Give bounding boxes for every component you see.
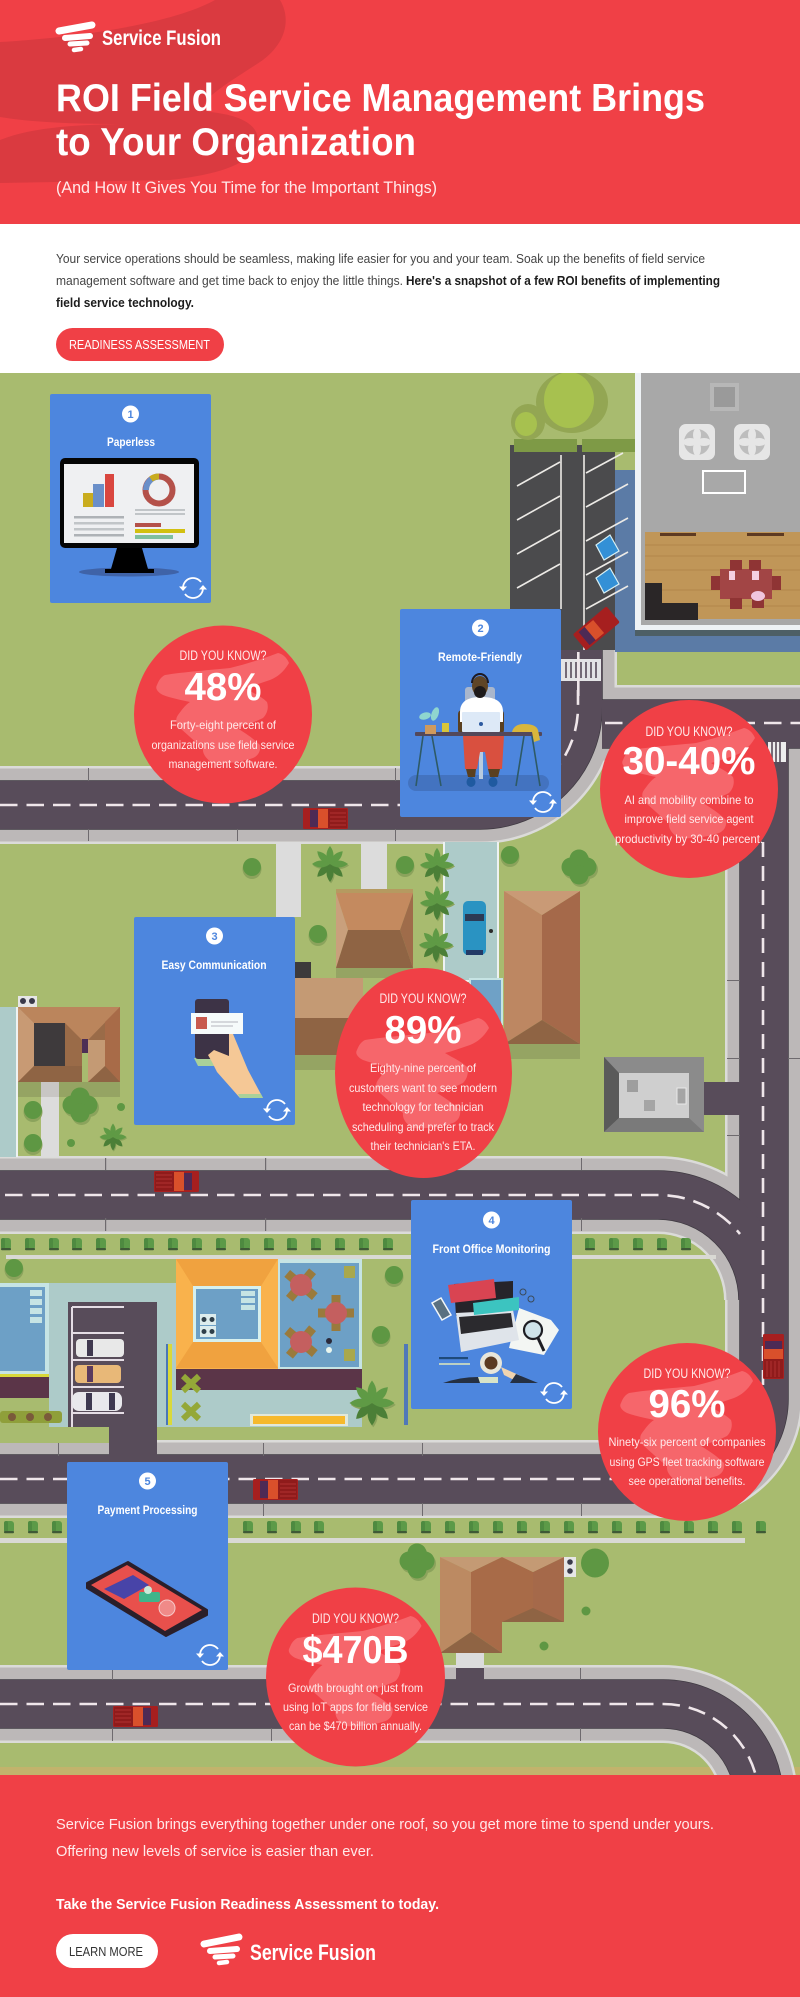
panel: card 2 remote-friendly: Remote-Friendly [438, 650, 522, 664]
header banner [0, 0, 800, 224]
icon: sync [263, 1100, 291, 1120]
panel: card 1 paperless: Paperless [107, 435, 155, 449]
callout: did you know $470B: Growth brought on just from [288, 1681, 423, 1695]
callout: did you know 96%: 96% [648, 1383, 726, 1426]
cafe roof [176, 1259, 278, 1369]
panel: card 5 payment processing: Payment Processing [98, 1503, 198, 1517]
icon: sync [529, 792, 557, 812]
callout: did you know $470B [266, 1588, 445, 1766]
panel: card 3 easy communication: Easy Communication [162, 958, 266, 972]
subtitle: (And How It Gives You Time for the Important Things) [56, 178, 437, 197]
callout: did you know $470B: can be $470 billion annually. [289, 1719, 422, 1733]
callout: did you know 48%: 48% [184, 666, 262, 709]
accessible parking signs [596, 535, 619, 593]
trees [511, 371, 608, 440]
title [56, 77, 705, 164]
callout: did you know 96%: DID YOU KNOW? [644, 1366, 730, 1381]
road network [0, 650, 800, 1800]
intro paragraph: field service technology. [56, 295, 194, 310]
callout: did you know 89%: DID YOU KNOW? [380, 991, 466, 1006]
grey utility building [604, 1057, 740, 1132]
callout: did you know 96%: Ninety-six percent of companies [608, 1435, 766, 1449]
house roof [504, 891, 580, 1059]
intro paragraph: Your service operations should be seamless, making life easier for you and your team. Soak up the benefits of field service [56, 251, 705, 266]
callout: did you know 89%: customers want to see modern [349, 1081, 497, 1095]
callout: did you know $470B: $470B [302, 1629, 408, 1672]
shrub row [0, 1411, 62, 1423]
footer text: Service Fusion brings everything together under one roof, so you get more time to spend under yours. [56, 1816, 714, 1833]
callout: did you know 48%: DID YOU KNOW? [180, 648, 266, 663]
callout: did you know 96%: using GPS fleet tracking software [610, 1455, 765, 1469]
callout: did you know 89%: technology for technician [362, 1100, 484, 1114]
callout: did you know 89%: their technician's ETA. [370, 1139, 476, 1153]
callout: did you know 48%: Forty-eight percent of [170, 718, 277, 732]
parked red car [573, 606, 620, 651]
crosswalks [561, 652, 786, 762]
callout: did you know 48% [134, 626, 312, 804]
callout: did you know 89%: scheduling and prefer to track [352, 1120, 495, 1134]
house left [0, 996, 120, 1157]
house roof [295, 978, 363, 1070]
conference room [645, 532, 800, 620]
map illustration [0, 371, 800, 1800]
callout: did you know $470B: using IoT apps for field service [283, 1700, 428, 1714]
callout: did you know $470B: DID YOU KNOW? [312, 1611, 399, 1626]
callout: did you know 96%: see operational benefits. [628, 1474, 746, 1488]
panel: card 5 payment processing [67, 1462, 228, 1670]
callout: did you know 30-40% [600, 700, 778, 878]
intro paragraph [56, 251, 720, 310]
callout: did you know 89%: Eighty-nine percent of [370, 1061, 477, 1075]
icon: desk with laptop [432, 1279, 559, 1383]
panel: card 5 payment processing: 5 [144, 1476, 151, 1488]
panel: card 4 front office monitoring: Front Office Monitoring [432, 1242, 550, 1256]
intro paragraph: Here's a snapshot of a few ROI benefits of implementing [406, 273, 720, 288]
lot details [4, 1259, 408, 1427]
callout: did you know 48%: management software. [168, 757, 278, 771]
red cars [113, 808, 784, 1727]
title: ROI Field Service Management Brings [56, 77, 705, 120]
icon: person at desk [408, 674, 549, 791]
button: readiness assessment: READINESS ASSESSMENT [69, 337, 210, 352]
icon: sync [179, 578, 207, 598]
parking area [68, 1302, 157, 1457]
panel: card 1 paperless [50, 394, 211, 603]
title: to Your Organization [56, 121, 416, 164]
callout: did you know 30-40%: productivity by 30-40 percent. [615, 832, 763, 846]
button: learn more [56, 1934, 158, 1968]
commercial lot [0, 1259, 408, 1457]
building roof [635, 373, 800, 636]
callout: did you know 96% [598, 1343, 776, 1521]
panel: card 2 remote-friendly [400, 609, 561, 817]
icon: hand with phone [191, 999, 263, 1098]
footer logo [204, 1937, 376, 1965]
callout: did you know 30-40%: DID YOU KNOW? [646, 724, 732, 739]
callout: did you know 48%: organizations use field service [152, 738, 295, 752]
logo: Service Fusion: Service Fusion [102, 27, 221, 50]
icon: monitor dashboard [60, 458, 199, 576]
button: learn more: LEARN MORE [69, 1944, 143, 1959]
panel: card 3 easy communication: 3 [211, 931, 218, 943]
left building [0, 1283, 49, 1398]
footer text [56, 1816, 714, 1860]
button: readiness assessment [56, 328, 224, 361]
footer logo: Service Fusion [250, 1940, 376, 1965]
panel: card 1 paperless: 1 [127, 409, 134, 421]
hedgerows [0, 1238, 766, 1543]
callout: did you know 30-40%: 30-40% [622, 740, 756, 783]
icon: sync [196, 1645, 224, 1665]
panel: card 3 easy communication [134, 917, 295, 1125]
icon: sync [540, 1383, 568, 1403]
callout: did you know 89% [335, 968, 512, 1178]
bottom house [400, 1544, 609, 1680]
office building and parking lot [510, 371, 800, 652]
icon: phone payment [87, 1562, 207, 1636]
house roof [336, 889, 413, 978]
footer call to action: Take the Service Fusion Readiness Assessment to today. [56, 1896, 439, 1913]
footer panel [0, 1775, 800, 1997]
logo: Service Fusion [59, 25, 221, 50]
patio [278, 1259, 362, 1369]
blue van [463, 901, 493, 955]
callout: did you know 30-40%: AI and mobility combine to [624, 793, 754, 807]
footer text: Offering new levels of service is easier than ever. [56, 1843, 374, 1860]
panel: card 2 remote-friendly: 2 [477, 623, 484, 635]
panel: card 4 front office monitoring: 4 [488, 1215, 495, 1227]
callout: did you know 30-40%: improve field service agent [624, 812, 754, 826]
panel: card 4 front office monitoring [411, 1200, 572, 1409]
callout: did you know 89%: 89% [384, 1009, 462, 1052]
residential block [0, 842, 598, 1157]
intro paragraph: management software and get time back to enjoy the little things. [56, 273, 403, 288]
